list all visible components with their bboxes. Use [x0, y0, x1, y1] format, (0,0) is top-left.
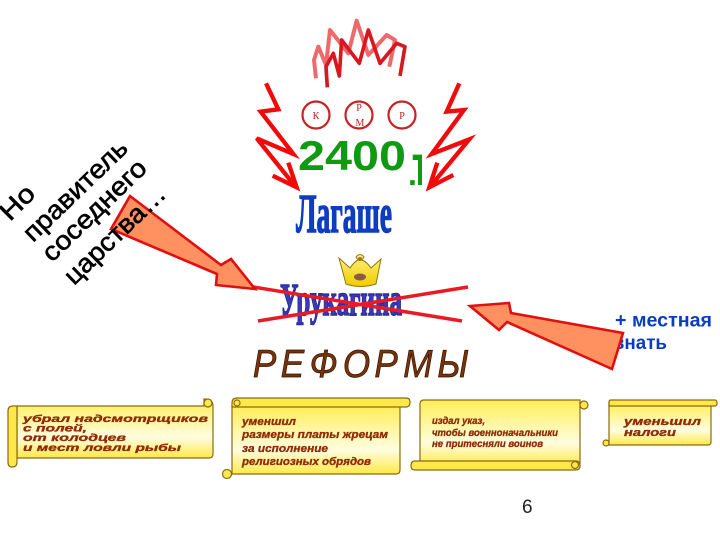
rotated text: Но правитель соседнего царства: соседнего [35, 153, 153, 267]
arrow: left [111, 196, 255, 289]
scroll 2: уменшил [241, 416, 296, 428]
scroll 1: убрал надсмотрщиков [21, 413, 209, 425]
scroll 1: от колодцев [23, 432, 127, 444]
scroll 4 [603, 400, 717, 446]
scroll 2 [222, 398, 410, 478]
scroll 3: издал указ, [432, 416, 485, 427]
page number: 6 [522, 497, 533, 518]
text: + местная знать: знать [615, 333, 667, 354]
icon: crown [339, 254, 381, 286]
scroll 1: с полей, [23, 422, 87, 434]
text: + местная знать: + местная [615, 310, 712, 332]
heading: reforms: РЕФОРМЫ [253, 341, 469, 385]
scroll 2: за исполнение [242, 443, 328, 455]
scroll 3: чтобы военноначальники [432, 427, 558, 439]
date suffix, mirrored [408, 134, 424, 198]
scroll 2: религиозных обрядов [241, 456, 371, 468]
scroll 4: уменьшил [623, 416, 701, 428]
scroll 1 [8, 399, 213, 467]
icon: flames [314, 21, 405, 87]
circles: К, РМ, Р: Р [356, 103, 362, 114]
date suffix, mirrored: . [408, 156, 417, 192]
scroll 1: и мест ловли рыбы [23, 442, 181, 454]
circles: К, РМ, Р: К [313, 111, 320, 122]
date: 2400: 2400 [298, 132, 406, 179]
icon: left lightning arrow [257, 83, 297, 187]
rotated text: Но правитель соседнего царства [0, 133, 172, 290]
rotated text: Но правитель соседнего царства: правитель [16, 133, 134, 247]
circles: К, РМ, Р: Р [399, 111, 405, 122]
circles: К, РМ, Р [302, 102, 416, 129]
heading: Лагаше: Лагаше [296, 183, 392, 244]
scroll 3 [411, 400, 588, 470]
strike-through cross [253, 287, 468, 321]
name: Урукагина: Урукагина [280, 275, 402, 325]
arrow: right [470, 303, 623, 369]
scroll 3: не притесняли воинов [432, 439, 543, 450]
circles: К, РМ, Р: М [356, 118, 365, 129]
text: + местная знать [615, 310, 712, 354]
scroll 2: размеры платы жрецам [241, 429, 388, 441]
icon: right lightning arrow [429, 83, 469, 187]
scroll 4: налоги [624, 427, 676, 439]
date suffix, mirrored: г [412, 134, 424, 198]
rotated text: Но правитель соседнего царства: царства… [57, 178, 172, 290]
